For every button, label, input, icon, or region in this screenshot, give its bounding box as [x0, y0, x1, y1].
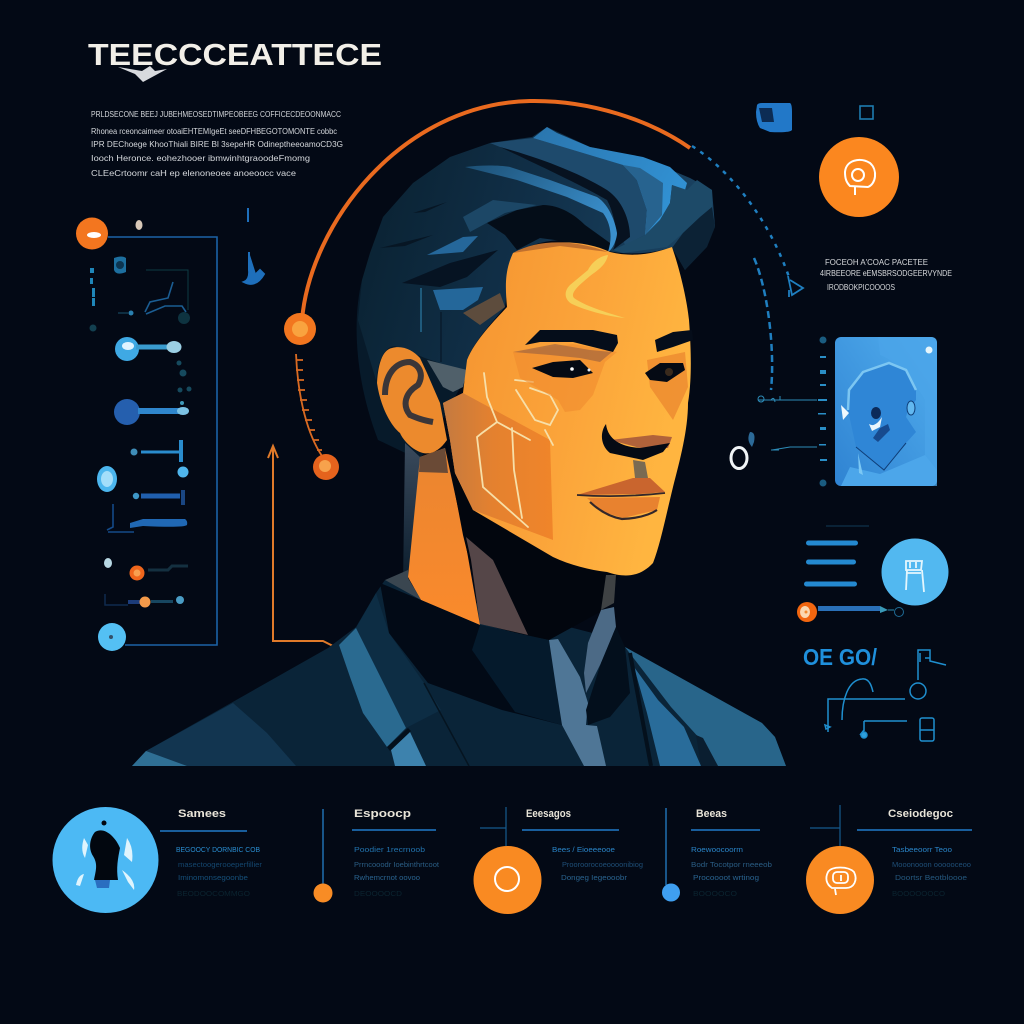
top camera icon [756, 103, 792, 132]
circuit diagram [825, 650, 946, 741]
back of head [357, 270, 470, 460]
scale ticks [818, 336, 827, 486]
right coat light panel [625, 647, 786, 766]
right coat seam [630, 653, 651, 766]
node: blue bar 5 [107, 504, 187, 532]
hair dark slash [402, 250, 498, 287]
column 5 text: Cseiodegoc [888, 808, 953, 820]
nose wedge [610, 435, 672, 448]
hair small slashes [380, 202, 447, 248]
card face marks [841, 346, 932, 470]
intro paragraph: PRLDSECONE BEEJ JUBEHMEOSEDTIMPEOBEEG COFFICECDEOONMACC [91, 109, 341, 119]
title swoosh icon [118, 66, 167, 82]
right coat light stripe [634, 667, 701, 766]
neck top shadow [419, 448, 448, 473]
column 5 text [857, 808, 972, 898]
connector lines to card [758, 396, 817, 450]
column 2 text [352, 808, 440, 898]
vertical divider with orange dot [314, 809, 332, 902]
eye socket shade [513, 344, 617, 412]
column 4 text: BOOOOCO [693, 889, 737, 898]
orange brain circle with connector [806, 805, 874, 914]
card lighter panel [878, 337, 937, 486]
upper lip [577, 478, 665, 495]
ear inner [385, 362, 433, 422]
column 4 text: Procoooot wrtinog [693, 873, 759, 882]
right text block: 4IRBEEORE eEMSBRSODGEERVYNDE [820, 269, 952, 278]
top square icon [860, 106, 873, 119]
orange list node [797, 602, 817, 622]
coat base [132, 580, 786, 766]
left eye [532, 360, 593, 378]
brow underside brown [513, 344, 612, 362]
side hair streaks [421, 288, 441, 362]
neck grey shade [466, 537, 528, 635]
small decoration at centre left [244, 208, 264, 284]
node: blue bar 4 [133, 490, 185, 505]
hair right section [613, 180, 712, 253]
left timeline nodes [76, 208, 264, 651]
small scattered dots [176, 360, 192, 405]
hair base [358, 127, 715, 380]
arc start node [284, 313, 316, 345]
orange brain circle [819, 137, 899, 217]
intro paragraph: CLEeCrtoomr caH ep elenoneoee anoeoocc vace [91, 168, 296, 178]
hair middle section [490, 138, 647, 245]
intro paragraph: Iooch Heronce. eohezhooer ibmwinhtgraoodeFmomg [91, 153, 310, 163]
column 2 text: Rwhemcrnot oovoo [354, 873, 420, 882]
title: TEECCCEATTECE [88, 37, 382, 72]
list bars [804, 540, 858, 586]
lower lip [587, 497, 660, 518]
column 5 text: Mooonooon oooooceoo [892, 860, 971, 869]
hair black blob [487, 205, 610, 252]
list with light blue circle [797, 526, 948, 622]
blue comma [748, 432, 754, 447]
philtrum [633, 460, 648, 478]
blue dotted arc [692, 146, 803, 390]
right eye [645, 363, 685, 382]
hair black wave [500, 147, 630, 250]
node: blue bar 3 [130, 440, 188, 478]
small top line [826, 525, 869, 527]
left lapel stripe [339, 628, 406, 747]
card head rim [848, 363, 916, 410]
node: blue ring [97, 466, 117, 492]
column 4 text: Bodr Tocotpor rneeeob [691, 860, 772, 869]
hair blue stripe [465, 166, 617, 252]
bottom row [52, 805, 972, 914]
blue handwritten label: OE GO/ [803, 644, 878, 670]
card head [848, 363, 916, 470]
column 5 text: Doortsr Beotbloooe [895, 873, 967, 882]
crest sub-shade [623, 165, 663, 235]
column 5 text: Tasbeeoorr Teoo [892, 845, 952, 854]
hair side blue patch [433, 287, 483, 310]
column 3 text [522, 808, 643, 882]
card ear [907, 401, 915, 415]
right dark lapel [586, 627, 630, 725]
node: orange dots [104, 558, 188, 608]
intro paragraph [91, 109, 343, 178]
column 4 text: Roewoocoorm [691, 845, 743, 854]
hair soft band [463, 200, 537, 232]
column 5 text: BOOOOOOCO [892, 889, 945, 898]
blue portrait card [835, 337, 937, 486]
right text block: FOCEOH A'COAC PACETEE [825, 258, 928, 267]
column 1 text: masectoogerooeperfillier [178, 860, 262, 869]
black collar [380, 583, 580, 725]
right coat notch [696, 735, 718, 766]
column 1 text: BEODOOCOMMGO [177, 889, 250, 898]
ear [377, 347, 447, 453]
node: blue pill 1 [115, 337, 182, 361]
column 2 text: DEOOOOCD [354, 889, 403, 898]
orange ring circle with connector [474, 807, 542, 914]
cheek shadow plane [443, 393, 553, 540]
forehead crease [566, 255, 625, 318]
cheek lines [477, 373, 558, 527]
right text block [820, 258, 952, 292]
hair under-right dark [672, 207, 715, 270]
orange arc [302, 101, 690, 320]
centre tie [549, 639, 606, 766]
left sleeve panel [132, 703, 296, 766]
column 3 text: Bees / Eioeeeooe [552, 845, 615, 854]
small icon cluster [90, 256, 190, 332]
collar lip [385, 570, 421, 600]
small beige dot [136, 220, 142, 230]
temple grey [427, 360, 467, 392]
neck back strip [403, 443, 420, 585]
column 1 text: Iminomonsegoonbe [178, 873, 248, 882]
coat seam [424, 683, 469, 766]
node: top orange [76, 218, 108, 250]
face [443, 242, 691, 575]
neck [408, 448, 480, 625]
intro paragraph: IPR DEChoege KhooThiali BIRE Bl 3sepeHR OdineptheeoamoCD3G [91, 139, 343, 149]
long bar [818, 606, 904, 616]
nostril shadow [602, 424, 670, 460]
right eyebrow [655, 330, 693, 352]
lapel dark slit [387, 728, 411, 751]
sleeve light corner [132, 751, 187, 766]
neck right shade [601, 575, 616, 610]
column 3 text: Prooroorocoeoooonibiog [562, 860, 643, 869]
column 2 text: Prrncooodr Ioebinthrtcoot [354, 860, 440, 869]
intro paragraph: Rhonea rceoncaimeer otoaiEHTEMIgeEt seeDFHBEGOTOMONTE cobbc [91, 126, 338, 136]
hair patch [427, 236, 478, 255]
left bracket frame [108, 237, 217, 645]
orange arrow [268, 446, 335, 647]
node: bottom light blue [98, 623, 126, 651]
left eyebrow [525, 330, 618, 352]
column 2 text: Espoocp [354, 808, 411, 820]
right text block: IRODBOKPICOOOOS [827, 283, 895, 292]
hair crest bright [533, 127, 687, 235]
node: blue pill 2 [114, 399, 189, 425]
hair brown glow [463, 293, 505, 325]
column 4 text [691, 808, 772, 898]
nose side shade [647, 352, 688, 420]
column 4 text: Beeas [696, 808, 727, 820]
card neck highlight [858, 453, 863, 475]
orange comb ticks [296, 354, 322, 456]
collar right half [472, 625, 580, 725]
jaw shadow [445, 440, 618, 640]
column 1 text [160, 808, 262, 898]
upper tie [584, 607, 616, 693]
mouth lines [577, 493, 665, 519]
column 3 text: Eeesagos [526, 808, 571, 820]
card shoulders [841, 455, 937, 486]
column 1 text: Samees [178, 808, 226, 820]
column 2 text: Poodier 1recrnoob [354, 845, 425, 854]
lower lapel stripe [391, 732, 426, 766]
column 3 text: Dongeg Iegeooobr [561, 873, 628, 882]
vertical divider with blue dot [662, 808, 680, 902]
dark lapel panel [356, 593, 441, 728]
light blue circle icon [882, 538, 948, 606]
white ring [731, 448, 747, 468]
comb end node [313, 454, 339, 480]
column 1 text: BEGOOCY DORNBIC COB [176, 845, 260, 854]
person illustration [132, 127, 786, 766]
forehead shadow [513, 242, 608, 253]
bottom icon: lightbulb head [52, 807, 158, 913]
